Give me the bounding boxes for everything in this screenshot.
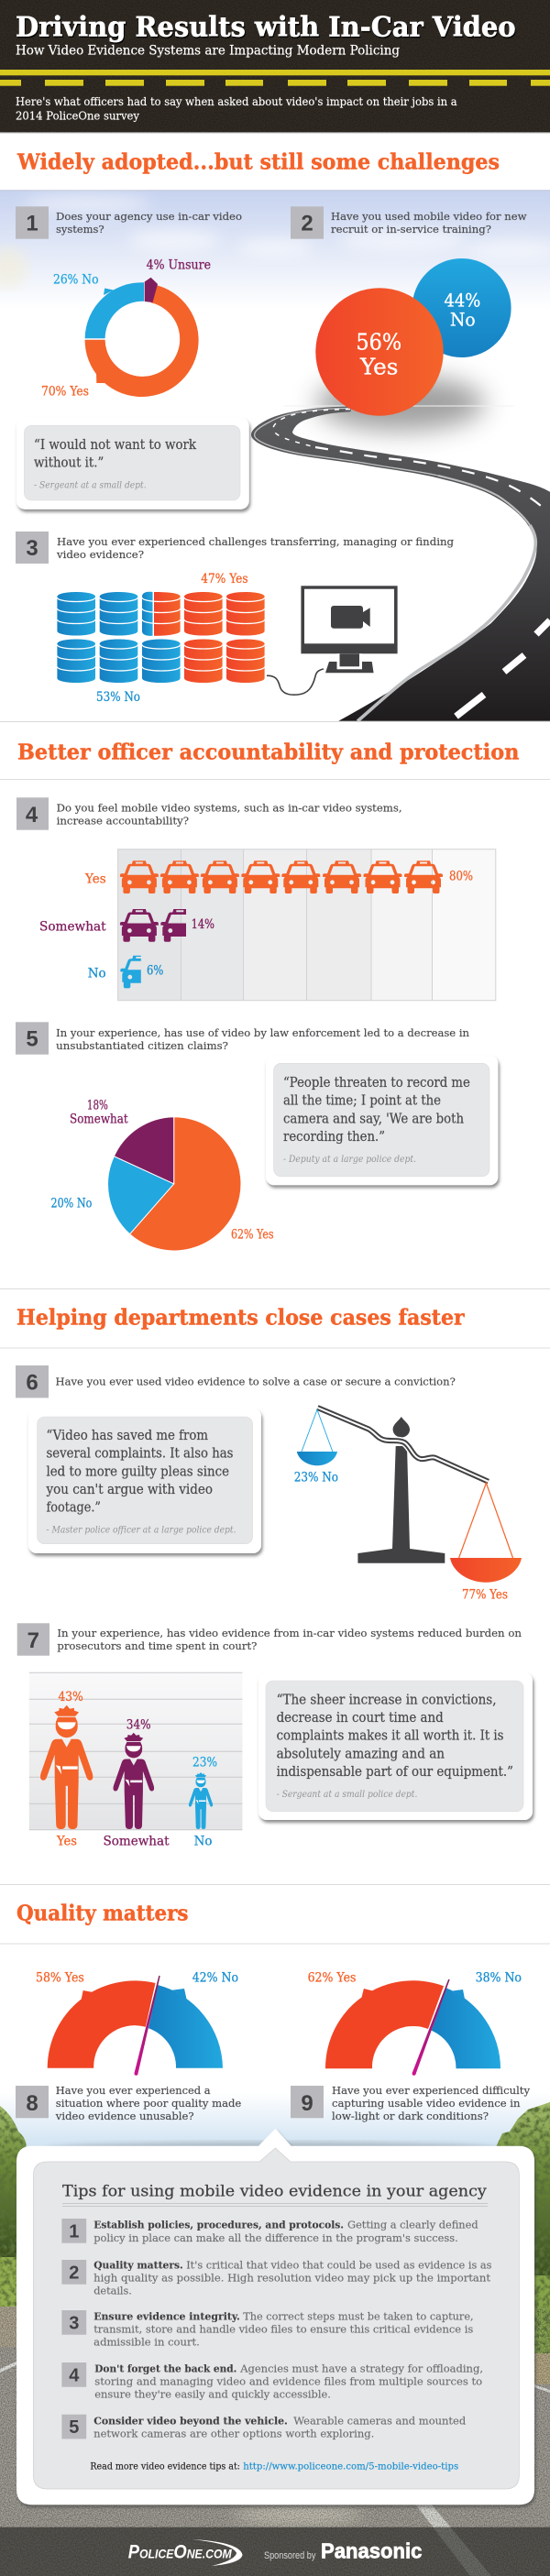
row: yes: Yes	[84, 871, 106, 886]
question 1	[16, 206, 242, 239]
heading: quality matters: Quality matters	[16, 1902, 189, 1926]
question 2: 2	[301, 212, 314, 236]
tip 2	[61, 2259, 492, 2297]
bubble shadow	[316, 376, 485, 431]
question 8: video evidence unusable?	[55, 2110, 194, 2122]
question 7: In your experience, has video evidence from in-car video systems reduced burden on	[57, 1627, 522, 1639]
tip 5	[61, 2414, 467, 2439]
quote: sheer increase in convictions: indispensable part of our equipment.”	[277, 1765, 513, 1780]
row: no: 6%	[147, 963, 163, 978]
pie labels: 20% No	[51, 1197, 92, 1211]
question 7	[17, 1623, 522, 1656]
cable	[267, 669, 324, 695]
quote: video has saved me	[28, 1409, 261, 1553]
tip 1: policy in place can make all the difference in the program's success.	[94, 2231, 458, 2244]
question 8	[16, 2084, 241, 2122]
right pan: 77% Yes	[462, 1588, 508, 1603]
tip 3: transmit, store and handle video files to ensure this critical evidence is	[94, 2323, 473, 2336]
quote: video has saved me: “Video has saved me from	[46, 1429, 208, 1443]
question 6: 6	[26, 1371, 38, 1395]
quote: sheer increase in convictions: “The sheer increase in convictions,	[277, 1693, 497, 1707]
question 7: prosecutors and time spent in court?	[57, 1639, 257, 1652]
labels: 58% Yes	[36, 1970, 84, 1985]
tip 1	[61, 2219, 478, 2244]
left trees	[0, 2106, 27, 2257]
bubble: 44% no	[412, 258, 512, 357]
pie labels: Somewhat	[70, 1112, 128, 1126]
question 9	[291, 2084, 530, 2122]
labels	[36, 1970, 238, 1985]
quote: sheer increase in convictions: absolutely amazing and an	[277, 1747, 445, 1761]
question 8: situation where poor quality made	[56, 2097, 241, 2110]
question 6	[16, 1365, 456, 1398]
label: 53% no: 53% No	[96, 690, 140, 705]
icon: scales chart	[294, 1408, 522, 1603]
quote: people threaten to record me: camera and say, 'We are both	[283, 1112, 464, 1126]
header banner	[0, 0, 550, 133]
database stacks chart	[57, 572, 265, 705]
officer: yes	[40, 1690, 93, 1848]
tip 4: Agencies must have a strategy for offloading,	[239, 2362, 483, 2374]
question 7: 7	[28, 1628, 39, 1653]
right trees	[495, 2102, 550, 2275]
icon: monitor with video camera	[301, 586, 398, 673]
row: somewhat: Somewhat	[39, 920, 106, 935]
databases	[57, 592, 265, 683]
bubble: 56% yes: 56%	[356, 329, 402, 356]
tip 3: admissible in court.	[94, 2336, 200, 2349]
question 5: unsubstantiated citizen claims?	[56, 1039, 228, 1052]
read more link	[90, 2461, 458, 2472]
gauge: question 8	[36, 1970, 238, 2076]
tips heading: Tips for using mobile video evidence in your agency	[62, 2183, 487, 2201]
label: no: 26% No	[53, 272, 99, 287]
label: 47% yes: 47% Yes	[201, 572, 248, 586]
car pictogram chart	[39, 850, 496, 1001]
tip 5: Consider video beyond the vehicle.	[94, 2414, 288, 2427]
footer	[0, 2527, 550, 2576]
road surface	[234, 2504, 362, 2526]
officer: no	[189, 1756, 217, 1848]
row: somewhat: 14%	[192, 917, 214, 932]
officer: no: 23%	[192, 1756, 217, 1770]
tip 4	[61, 2362, 483, 2400]
question 5: 5	[26, 1026, 38, 1052]
row: no: No	[88, 967, 106, 981]
read more link: http://www.policeone.com/5-mobile-video-tips	[243, 2461, 458, 2472]
question 2: recruit or in-service training?	[331, 223, 491, 236]
heading: better officer accountability: Better officer accountability and protection	[17, 740, 520, 764]
question 4: increase accountability?	[57, 814, 189, 827]
question 1: systems?	[56, 223, 104, 236]
tip 4: storing and managing video and evidence files from multiple sources to	[94, 2374, 482, 2387]
tip 5: Wearable cameras and mounted	[293, 2414, 467, 2427]
quote: would not want to work without it: without it.”	[34, 456, 104, 471]
officer: somewhat: 34%	[126, 1718, 151, 1733]
question 8: Have you ever experienced a	[56, 2084, 211, 2097]
officer: yes: 43%	[59, 1690, 83, 1705]
pie labels: 18%	[87, 1099, 108, 1113]
panel: tips	[16, 2129, 534, 2505]
question 2: Have you used mobile video for new	[331, 210, 527, 223]
tip 3	[61, 2310, 474, 2349]
labels: 62% Yes	[308, 1970, 356, 1985]
officer: yes: Yes	[56, 1834, 77, 1848]
row: yes: 80%	[449, 870, 473, 884]
question 1: Does your agency use in-car video	[56, 210, 242, 223]
bubble: 56% yes	[315, 288, 444, 416]
officer: somewhat: Somewhat	[103, 1834, 170, 1848]
subtitle: How Video Evidence Systems are Impacting Modern Policing	[16, 43, 400, 58]
quote: people threaten to record me: all the time; I point at the	[283, 1094, 441, 1109]
left pan	[294, 1409, 338, 1485]
winding road	[251, 406, 550, 721]
question 3: 3	[26, 536, 38, 561]
quote: people threaten to record me: recording then.”	[283, 1130, 385, 1145]
quote: video has saved me: footage.”	[46, 1501, 101, 1516]
question 5	[16, 1022, 470, 1055]
tip 1: Getting a clearly defined	[347, 2219, 478, 2231]
question 4: 4	[26, 803, 38, 828]
tip 3: The correct steps must be taken to capture,	[243, 2310, 474, 2323]
bubble: 56% yes: Yes	[359, 353, 398, 379]
logo: panasonic: Panasonic	[321, 2539, 423, 2563]
question 9: capturing usable video evidence in	[332, 2097, 521, 2110]
tip 4: Don't forget the back end.	[94, 2362, 236, 2374]
quote: would not want to work without it	[16, 418, 249, 510]
label: unsure: 4% Unsure	[147, 258, 211, 272]
label: yes: 70% Yes	[41, 385, 89, 400]
quote: sheer increase in convictions: - Sergeant at a small police dept.	[277, 1789, 417, 1800]
question 8: 8	[26, 2091, 38, 2116]
quote: would not want to work without it: - Sergeant at a small dept.	[34, 480, 147, 491]
question 4	[16, 797, 402, 830]
tip 2: 2	[69, 2264, 79, 2284]
quote: video has saved me: you can't argue with video	[46, 1483, 213, 1497]
row: somewhat	[39, 909, 214, 942]
tip 2: high quality as possible. High resolution video may pick up the important	[94, 2272, 490, 2285]
bottom scene: sky, trees and road	[0, 2092, 550, 2576]
officer: no: No	[194, 1834, 213, 1848]
pie labels: 62% Yes	[231, 1228, 274, 1243]
right pan	[450, 1483, 522, 1603]
question 9: 9	[301, 2091, 314, 2116]
quote: video has saved me: several complaints. It also has	[46, 1447, 233, 1462]
gauge: question 9	[308, 1970, 522, 2076]
intro text: 2014 PoliceOne survey	[16, 109, 140, 123]
question 3: Have you ever experienced challenges transferring, managing or finding	[57, 535, 455, 548]
pie labels	[51, 1099, 274, 1243]
tip 1: Establish policies, procedures, and protocols.	[94, 2219, 344, 2231]
quote: video has saved me: led to more guilty pleas since	[46, 1464, 229, 1479]
tip 3: 3	[69, 2313, 79, 2333]
question 4: Do you feel mobile video systems, such as in-car video systems,	[57, 801, 402, 814]
intro text: Here's what officers had to say when asked about video's impact on their jobs in a	[16, 94, 457, 108]
officer pictogram chart	[29, 1672, 242, 1848]
quote: people threaten to record me: “People threaten to record me	[283, 1076, 470, 1091]
tip 2: details.	[94, 2285, 132, 2297]
question 2	[291, 206, 527, 239]
labels: 38% No	[476, 1970, 522, 1985]
sky background	[0, 190, 550, 309]
tip 4: 4	[69, 2366, 80, 2386]
row: yes	[84, 860, 473, 893]
tip 1: 1	[69, 2221, 79, 2242]
question 1: 1	[26, 212, 38, 236]
heading: helping departments: Helping departments close cases faster	[16, 1306, 466, 1331]
labels	[308, 1970, 522, 1985]
quote: sheer increase in convictions: complaints makes it all worth it. It is	[277, 1729, 504, 1744]
tip 5: 5	[69, 2417, 79, 2438]
quote: people threaten to record me: - Deputy at a large police dept.	[283, 1154, 416, 1165]
question 6: Have you ever used video evidence to solve a case or secure a conviction?	[55, 1376, 456, 1388]
title: Driving Results with In-Car Video	[16, 11, 516, 44]
quote: video has saved me: - Master police officer at a large police dept.	[46, 1525, 236, 1536]
question 9: low-light or dark conditions?	[332, 2110, 489, 2122]
road lines	[0, 70, 550, 86]
tip 4: ensure they're easily and quickly accessible.	[94, 2387, 331, 2400]
row: no	[88, 956, 163, 988]
donut chart: agency use	[41, 258, 211, 400]
question 5: In your experience, has use of video by law enforcement led to a decrease in	[56, 1026, 470, 1039]
tip 2: Quality matters.	[94, 2259, 183, 2272]
question 3	[16, 532, 455, 564]
labels: 42% No	[192, 1970, 238, 1985]
heading: widely adopted: Widely adopted...but still some challenges	[16, 149, 500, 174]
officer: somewhat	[103, 1718, 170, 1848]
tip 3: Ensure evidence integrity.	[94, 2310, 240, 2323]
quote: would not want to work without it: “I would not want to work	[34, 438, 196, 453]
logo: policeone: POLICEONE.COM	[128, 2542, 232, 2562]
bubble: 44% no: No	[450, 308, 476, 330]
read more link: Read more video evidence tips at:	[90, 2461, 240, 2472]
quote: people threaten to record me	[266, 1056, 498, 1185]
quote: sheer increase in convictions: decrease in court time and	[277, 1711, 444, 1726]
intro text	[16, 94, 457, 123]
question 9: Have you ever experienced difficulty	[332, 2084, 530, 2097]
sponsored by: Sponsored by	[264, 2550, 316, 2561]
tip 5: network cameras are other options worth exploring.	[94, 2427, 374, 2439]
question 3: video evidence?	[56, 548, 144, 561]
pie chart: citizen claims	[51, 1099, 274, 1251]
tip 2: It's critical that video that could be used as evidence is as	[186, 2259, 492, 2272]
bubble: 44% no: 44%	[444, 290, 480, 312]
quote: sheer increase in convictions	[258, 1672, 533, 1820]
left pan: 23% No	[294, 1471, 338, 1485]
